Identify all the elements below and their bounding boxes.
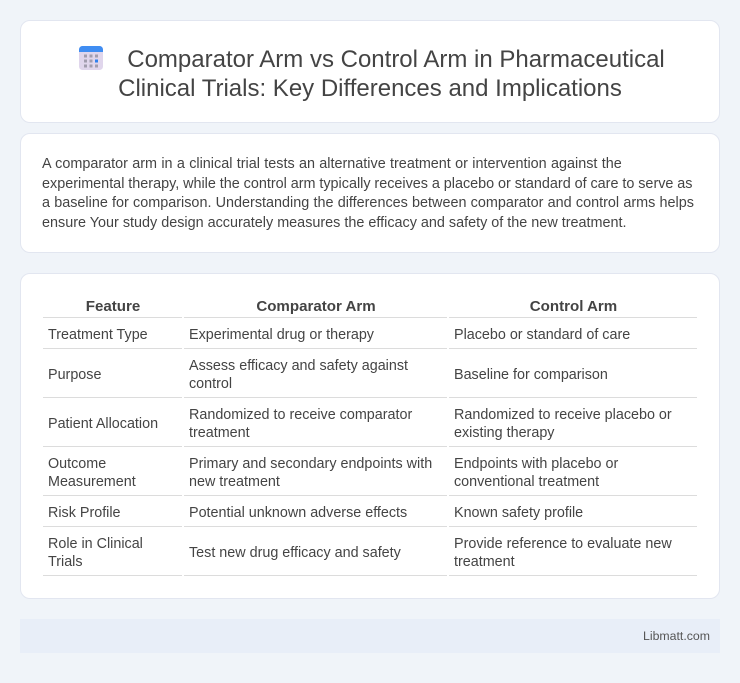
table header: Comparator Arm — [256, 298, 376, 315]
row: patient allocation: treatment — [189, 425, 250, 441]
row: risk profile: Risk Profile — [48, 505, 121, 521]
row: role in clinical trials: Trials — [48, 554, 83, 570]
row: purpose: Assess efficacy and safety against — [189, 358, 408, 374]
row: treatment type: Treatment Type — [48, 327, 148, 343]
row: outcome measurement: Outcome — [48, 456, 106, 472]
row: outcome measurement: Endpoints with placebo or — [454, 456, 618, 472]
row: purpose — [48, 358, 608, 392]
footer — [20, 619, 720, 653]
row: treatment type: Experimental drug or therapy — [189, 327, 374, 343]
row: role in clinical trials: Role in Clinical — [48, 536, 143, 552]
row: patient allocation: Randomized to receive comparator — [189, 407, 412, 423]
intro paragraph — [42, 156, 694, 231]
row: treatment type — [48, 327, 630, 343]
row: outcome measurement: conventional treatment — [454, 474, 599, 490]
row: risk profile — [48, 505, 583, 521]
heading: Comparator Arm vs Control Arm in Pharmaceutical — [127, 46, 665, 73]
heading — [118, 46, 665, 102]
row: outcome measurement: Primary and secondary endpoints with — [189, 456, 432, 472]
row: outcome measurement: Measurement — [48, 474, 136, 490]
intro paragraph: ensure Your study design accurately measures the efficacy and safety of the new treatment. — [42, 215, 626, 231]
row: risk profile: Known safety profile — [454, 505, 583, 521]
row: risk profile: Potential unknown adverse effects — [189, 505, 407, 521]
row: role in clinical trials: Provide reference to evaluate new — [454, 536, 672, 552]
row: outcome measurement — [48, 456, 618, 490]
heading: Clinical Trials: Key Differences and Implications — [118, 75, 622, 102]
intro paragraph: a baseline for comparison. Understanding the differences between comparator and control arms helps — [42, 195, 694, 211]
table header: Control Arm — [530, 298, 617, 315]
table panel — [20, 273, 720, 599]
intro paragraph: experimental therapy, while the control arm typically receives a placebo or standard of care to serve as — [42, 176, 693, 192]
row: treatment type: Placebo or standard of care — [454, 327, 630, 343]
intro text panel — [20, 133, 720, 253]
table header: Feature — [86, 298, 140, 315]
table header — [86, 298, 617, 315]
intro paragraph: A comparator arm in a clinical trial tests an alternative treatment or intervention against the — [42, 156, 622, 172]
row: patient allocation: existing therapy — [454, 425, 554, 441]
row: outcome measurement: new treatment — [189, 474, 280, 490]
title card — [20, 20, 720, 123]
footer credit: Libmatt.com — [643, 629, 710, 643]
row: role in clinical trials — [48, 536, 672, 570]
row: patient allocation: Patient Allocation — [48, 416, 158, 432]
row: role in clinical trials: Test new drug efficacy and safety — [189, 545, 401, 561]
icon: calendar — [79, 46, 103, 70]
row: purpose: Baseline for comparison — [454, 367, 608, 383]
row: role in clinical trials: treatment — [454, 554, 515, 570]
row: purpose: Purpose — [48, 367, 101, 383]
row: patient allocation — [48, 407, 672, 441]
row: patient allocation: Randomized to receive placebo or — [454, 407, 672, 423]
row: purpose: control — [189, 376, 232, 392]
